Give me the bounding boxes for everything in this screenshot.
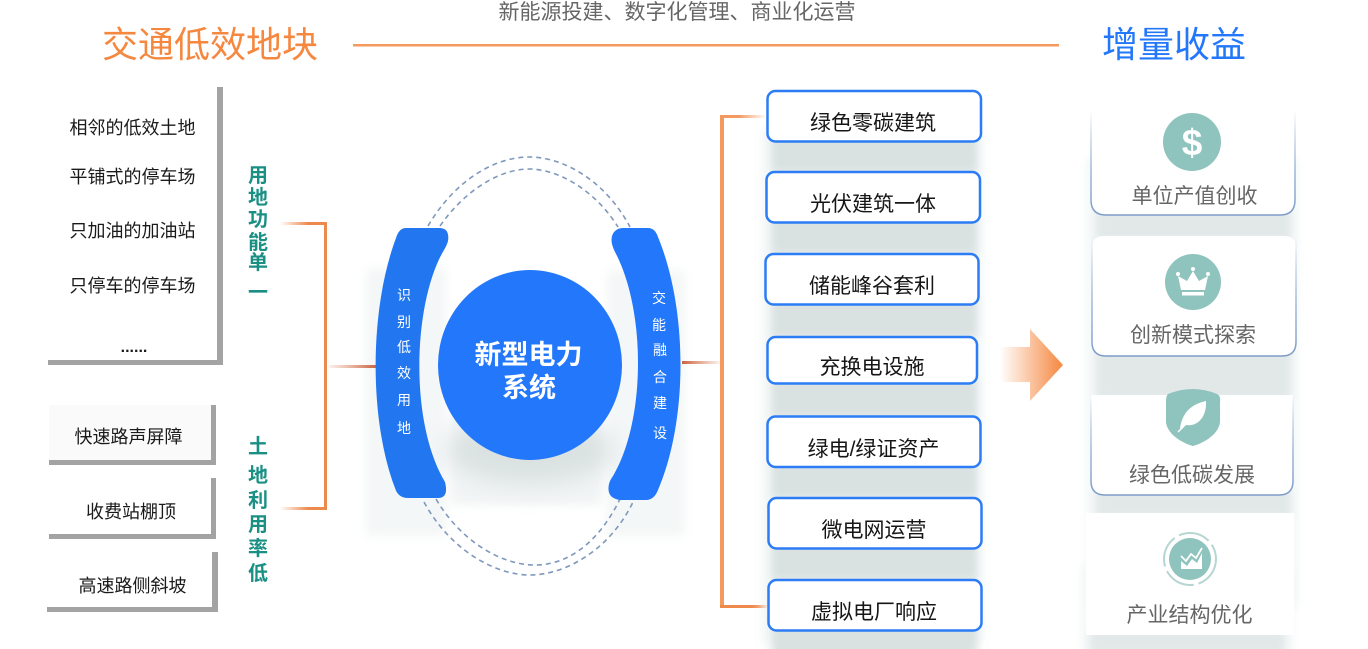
title: low-efficiency transport land: 交通低效地块 bbox=[102, 24, 318, 65]
center diagram shadows bbox=[366, 268, 685, 536]
box: charging and swapping: 充换电设施 bbox=[820, 356, 924, 379]
subtitle: 新能源投建、数字化管理、商业化运营 bbox=[498, 1, 856, 24]
label: low land utilisation: 用 bbox=[248, 514, 268, 536]
left arc: identify low-efficiency land bbox=[376, 228, 448, 498]
label: single land use bbox=[248, 165, 268, 304]
box: green zero-carbon buildings bbox=[768, 91, 981, 142]
center circle: new power system: 系统 bbox=[502, 373, 556, 403]
right bracket connector bbox=[720, 115, 767, 608]
box: charging and swapping bbox=[768, 337, 977, 384]
panel: highway slope: 高速路侧斜坡 bbox=[78, 576, 186, 596]
card: innovative model bbox=[1092, 236, 1296, 356]
list item: 只停车的停车场 bbox=[70, 276, 196, 296]
label: single land use: 单 bbox=[248, 251, 268, 274]
right arc: energy-transport integration: 合 bbox=[653, 369, 667, 385]
title: incremental revenue: 增量收益 bbox=[1102, 24, 1246, 65]
box: green power assets bbox=[768, 416, 980, 467]
box: BIPV: 光伏建筑一体 bbox=[810, 193, 936, 216]
label: single land use: 一 bbox=[248, 282, 268, 304]
center circle: new power system: 新型电力 bbox=[474, 340, 582, 370]
label: low land utilisation: 低 bbox=[248, 562, 268, 585]
dashed orbit rings bbox=[424, 157, 633, 575]
right arc: energy-transport integration: 融 bbox=[653, 342, 667, 358]
label: low land utilisation: 地 bbox=[248, 464, 268, 487]
label: low land utilisation: 率 bbox=[248, 537, 268, 560]
right arc: energy-transport integration: 能 bbox=[652, 317, 666, 333]
right arc: energy-transport integration: 交 bbox=[652, 290, 666, 306]
list item: 相邻的低效土地 bbox=[70, 118, 196, 138]
left arc: identify low-efficiency land: 地 bbox=[397, 420, 411, 436]
label: single land use: 地 bbox=[248, 186, 268, 209]
box: storage arbitrage: 储能峰谷套利 bbox=[809, 275, 935, 298]
card label: 创新模式探索 bbox=[1130, 324, 1256, 347]
box: storage arbitrage bbox=[766, 254, 978, 304]
panel: noise barrier: 快速路声屏障 bbox=[74, 427, 182, 447]
right arc: energy-transport integration: 建 bbox=[653, 395, 667, 411]
center circle: new power system bbox=[438, 270, 622, 460]
connector out of right arc bbox=[682, 361, 720, 364]
icon: dollar bbox=[1163, 113, 1221, 171]
label: single land use: 用 bbox=[248, 165, 268, 187]
arrow bbox=[1000, 329, 1063, 401]
box: green power assets: 绿电/绿证资产 bbox=[808, 438, 939, 461]
left arc: identify low-efficiency land: 低 bbox=[397, 339, 411, 355]
box: virtual power plant: 虚拟电厂响应 bbox=[811, 601, 937, 624]
left arc: identify low-efficiency land: 效 bbox=[397, 365, 411, 381]
card label: 单位产值创收 bbox=[1132, 185, 1258, 208]
box: green zero-carbon buildings: 绿色零碳建筑 bbox=[810, 112, 936, 135]
right arc: energy-transport integration: 设 bbox=[653, 425, 667, 441]
card label: 绿色低碳发展 bbox=[1129, 464, 1255, 487]
icon: leaf shield bbox=[1166, 389, 1220, 446]
card: green low-carbon development bbox=[1091, 389, 1293, 495]
right arc: energy-transport integration bbox=[608, 228, 680, 500]
box: BIPV bbox=[766, 172, 980, 222]
left bracket connector bbox=[280, 222, 327, 510]
card label: 产业结构优化 bbox=[1126, 604, 1252, 627]
icon: dollar: $ bbox=[1182, 122, 1203, 163]
label: single land use: 能 bbox=[248, 231, 268, 254]
list item: 平铺式的停车场 bbox=[70, 167, 196, 187]
card shadows bbox=[1082, 158, 1297, 649]
panel: noise barrier bbox=[49, 405, 216, 465]
panel: highway slope bbox=[47, 552, 218, 612]
box: microgrid bbox=[768, 498, 982, 548]
label: low land utilisation: 利 bbox=[248, 489, 268, 512]
header connector line bbox=[353, 44, 1059, 46]
list item: 只加油的加油站 bbox=[70, 221, 196, 241]
icon: crown bbox=[1165, 254, 1221, 310]
label: single land use: 功 bbox=[248, 208, 268, 231]
left arc: identify low-efficiency land: 别 bbox=[397, 314, 411, 330]
connector into left arc bbox=[329, 365, 377, 368]
panel: toll station canopy bbox=[49, 478, 216, 539]
left arc: identify low-efficiency land: 用 bbox=[397, 392, 411, 408]
panel: low-efficiency land list bbox=[48, 87, 223, 365]
panel: toll station canopy: 收费站棚顶 bbox=[86, 502, 176, 522]
left arc: identify low-efficiency land: 识 bbox=[397, 287, 411, 303]
list item: ellipsis: ...... bbox=[121, 339, 147, 356]
label: low land utilisation bbox=[248, 435, 268, 585]
box shadows bbox=[762, 128, 982, 649]
card: industrial structure optimisation bbox=[1086, 513, 1294, 635]
box: microgrid: 微电网运营 bbox=[822, 519, 926, 542]
card: unit value revenue bbox=[1091, 110, 1295, 215]
icon: growth chart bbox=[1164, 533, 1216, 585]
box: virtual power plant bbox=[768, 580, 982, 630]
label: low land utilisation: 土 bbox=[248, 435, 268, 458]
